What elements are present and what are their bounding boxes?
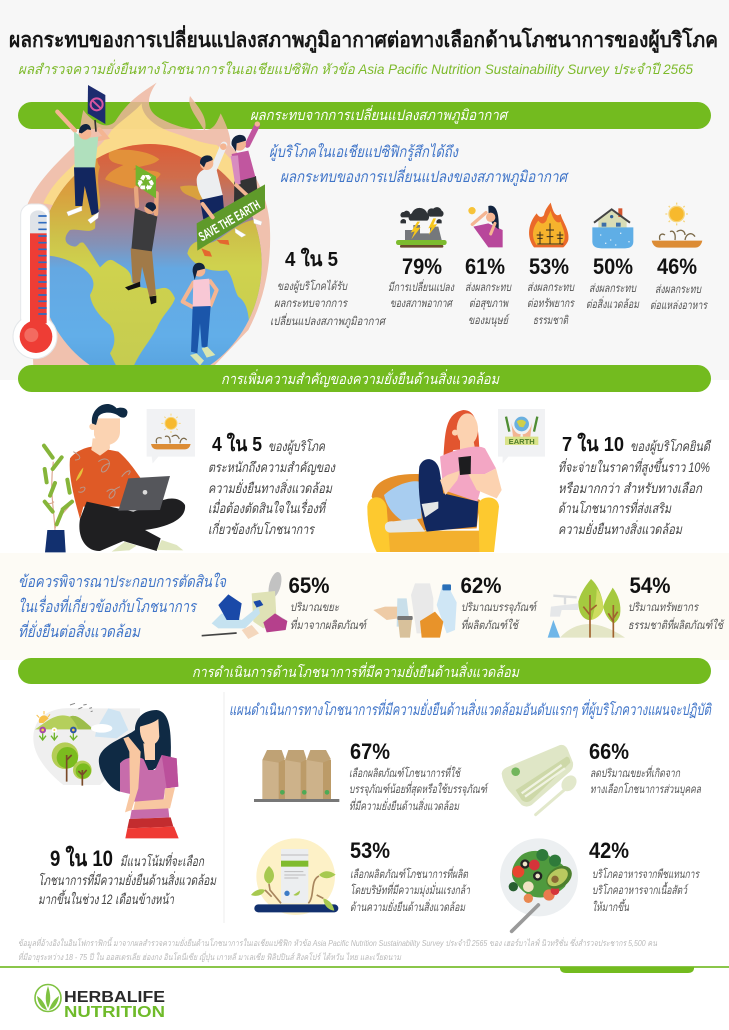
stat: 9 in 10: มีแนวโน้มที่จะเลือก [120, 852, 205, 869]
stat: 4 in 5 consumers: เปลี่ยนแปลงสภาพภูมิอากาศ [270, 313, 386, 328]
stat: 53 percent: โดยบริษัทที่มีความมุ่งมั่นแรงกล้า [350, 882, 470, 897]
icon: packaging containers [373, 583, 457, 638]
speech bubble: hands holding earth: EARTH [509, 439, 535, 446]
section bar 1 label: ผลกระทบจากการเปลี่ยนแปลงสภาพภูมิอากาศ [250, 105, 510, 124]
stat: 79 percent: ของสภาพอากาศ [390, 298, 453, 310]
blue subheading 1: ผลกระทบของการเปลี่ยนแปลงของสภาพภูมิอากาศ [280, 166, 570, 187]
flames [27, 83, 270, 367]
illustration: globe with flames, protesters and thermometer [13, 83, 277, 384]
icon: flooded house [592, 208, 633, 248]
stat: 46 percent [650, 254, 708, 312]
stat: 9 in 10: โภชนาการที่มีความยั่งยืนด้านสิ่งแวดล้อม [38, 871, 217, 888]
page background: top grey band [0, 0, 729, 380]
stat: 42 percent: 42% [589, 838, 629, 863]
land: americas [50, 158, 175, 365]
protester in white shirt [197, 143, 229, 257]
stat: 53 percent [350, 838, 470, 914]
stat: 61 percent: ต่อสุขภาพ [469, 298, 509, 310]
stat: 79 percent: 79% [402, 254, 442, 279]
section bar 3: การดำเนินการด้านโภชนาการที่มีความยั่งยืนด้านสิ่งแวดล้อม [192, 662, 520, 681]
stat: 4 in 5 aware: ตระหนักถึงความสำคัญของ [208, 460, 336, 476]
banner: save the earth [196, 184, 265, 251]
footer line and tab [0, 966, 729, 973]
icon: storm [396, 207, 447, 248]
section bar 2 [18, 365, 711, 392]
stat: 53 percent: ต่อทรัพยากร [527, 297, 575, 310]
stat: 53 percent: ด้านความยั่งยืนด้านสิ่งแวดล้อม [350, 899, 466, 914]
protester in pink top [183, 263, 217, 365]
stat: 4 in 5 consumers: ของผู้บริโภคได้รับ [277, 279, 348, 293]
icon: wildfire [529, 203, 569, 247]
stat: 4 in 5 aware: เมื่อต้องตัดสินใจในเรื่องที่ [208, 499, 327, 516]
protester with recycling sign [125, 165, 157, 304]
stat: 7 in 10 willing to pay: ความยั่งยืนทางสิ่งแวดล้อม [558, 520, 683, 537]
stat: 61 percent [465, 254, 512, 327]
stat: 79 percent [388, 254, 455, 310]
blue subheading 1: ผู้บริโภคในเอเชียแปซิฟิกรู้สึกได้ถึง [269, 143, 459, 162]
section bar 1 [18, 102, 711, 129]
divider [223, 692, 225, 923]
stat: 53 percent [527, 254, 575, 327]
stat: 42 percent [589, 838, 700, 914]
thermometer [13, 204, 57, 359]
stat: 4 in 5 consumers: ผลกระทบจากการ [274, 298, 349, 310]
icon: faucet and trees [548, 579, 625, 638]
stat: 66 percent: 66% [589, 739, 629, 764]
icon: product with plants [251, 838, 338, 915]
illustration: woman thinking and nature [33, 703, 179, 838]
stat: 54 percent [628, 573, 725, 632]
stat: 62 percent: 62% [460, 573, 502, 598]
stat: 4 in 5 aware: ความยั่งยืนทางสิ่งแวดล้อม [208, 479, 333, 496]
stat: 66 percent: ลดปริมาณขยะที่เกิดจาก [590, 765, 681, 780]
stat: 4 in 5 consumers [270, 247, 386, 328]
stat: 9 in 10 [38, 845, 217, 907]
stat: 67 percent: 67% [350, 739, 390, 764]
stat: 62 percent: ปริมาณบรรจุภัณฑ์ [461, 600, 538, 614]
stat: 9 in 10: 9 ใน 10 [50, 845, 113, 871]
stat: 67 percent [349, 739, 489, 813]
blue heading: decision considerations: ในเรื่องที่เกี่ยวข้องกับโภชนาการ [18, 595, 198, 616]
logo: Herbalife Nutrition [35, 984, 165, 1021]
icon: cardboard cartons [254, 750, 339, 802]
stat: 7 in 10 willing to pay: ด้านโภชนาการที่ส่งเสริม [558, 499, 672, 516]
stat: 46 percent: ส่งผลกระทบ [655, 284, 702, 296]
stat: 65 percent: ที่มาจากผลิตภัณฑ์ [290, 617, 369, 632]
stat: 4 in 5 aware: เกี่ยวข้องกับโภชนาการ [208, 520, 315, 537]
stat: 54 percent: 54% [630, 573, 670, 598]
stat: 79 percent: มีการเปลี่ยนแปลง [388, 279, 455, 294]
stat: 66 percent [589, 739, 702, 796]
page background: cream band [0, 553, 729, 660]
stat: 4 in 5 aware: 4 ใน 5 [212, 432, 262, 456]
section bar 2: การเพิ่มความสำคัญของความยั่งยืนด้านสิ่งแวดล้อม [221, 369, 500, 388]
stat: 62 percent: ที่ผลิตภัณฑ์ใช้ [461, 617, 520, 632]
stat: 67 percent: ที่มีความยั่งยืนด้านสิ่งแวดล้อม [349, 798, 460, 813]
blue heading: decision considerations [18, 572, 227, 641]
globe [50, 144, 262, 365]
stat: 7 in 10 willing to pay [558, 432, 712, 537]
stat: 54 percent: ปริมาณทรัพยากร [628, 601, 699, 614]
stat: 53 percent: ธรรมชาติ [533, 314, 569, 327]
stat: 62 percent [460, 573, 538, 632]
stat: 50 percent [586, 254, 640, 311]
logo: Herbalife Nutrition: HERBALIFE [64, 989, 165, 1006]
stat: 61 percent: ของมนุษย์ [468, 313, 510, 327]
blue heading: decision considerations: ข้อควรพิจารณาประกอบการตัดสินใจ [18, 572, 227, 591]
section bar 3 [18, 658, 711, 684]
banner: save the earth: SAVE THE EARTH [196, 197, 263, 244]
speech bubble: hands holding earth [498, 409, 545, 463]
protester with recycling sign: ♻ [137, 173, 154, 192]
icon: reusable cutlery case [502, 745, 580, 815]
stat: 65 percent [288, 573, 369, 632]
stat: 7 in 10 willing to pay: 7 ใน 10 [562, 432, 624, 456]
stat: 61 percent: 61% [465, 254, 505, 279]
stat: 53 percent: 53% [350, 838, 390, 863]
stat: 53 percent: ส่งผลกระทบ [527, 282, 575, 294]
stat: 46 percent: ต่อแหล่งอาหาร [650, 300, 708, 312]
protester with no sign [57, 85, 106, 224]
stat: 61 percent: ส่งผลกระทบ [465, 282, 512, 294]
protester in purple shirt [231, 121, 262, 237]
logo: Herbalife Nutrition: NUTRITION [64, 1004, 165, 1021]
stat: 50 percent: 50% [593, 254, 633, 279]
land: africa [187, 220, 262, 320]
stat: 42 percent: ให้มากขึ้น [592, 898, 630, 914]
stat: 4 in 5 consumers: 4 ใน 5 [285, 247, 338, 271]
footnote [18, 937, 657, 963]
illustration: man with laptop and plant [44, 404, 185, 552]
subtitle: ผลสำรวจความยั่งยืนทางโภชนาการในเอเชียแปซิฟิก หัวข้อ Asia Pacific Nutrition Sustainability Survey ประจำปี 2565 [18, 59, 693, 77]
stat: 9 in 10: มากขึ้นในช่วง 12 เดือนข้างหน้า [38, 889, 174, 907]
speech bubble: sun and crops [147, 409, 195, 463]
blue subheading 1 [269, 143, 570, 187]
stat: 7 in 10 willing to pay: หรือมากกว่า สำหรับทางเลือก [558, 481, 703, 496]
illustration: woman on armchair [367, 410, 502, 552]
stat: 50 percent: ส่งผลกระทบ [589, 283, 637, 295]
icon: packaging waste pile [202, 571, 288, 639]
icon: salad plate with fork [500, 838, 578, 931]
stat: 4 in 5 aware [208, 432, 336, 537]
stat: 50 percent: ต่อสิ่งแวดล้อม [586, 296, 640, 311]
stat: 42 percent: บริโภคอาหารจากเนื้อสัตว์ [592, 881, 689, 897]
stat: 7 in 10 willing to pay: ของผู้บริโภคยินดี [630, 438, 712, 455]
stat: 65 percent: ปริมาณขยะ [290, 601, 340, 614]
land: gold patch [180, 186, 202, 200]
stat: 46 percent: 46% [657, 254, 697, 279]
stat: 67 percent: เลือกผลิตภัณฑ์โภชนาการที่ใช้ [349, 765, 461, 780]
stat: 53 percent: เลือกผลิตภัณฑ์โภชนาการที่ผลิต [350, 866, 468, 881]
footnote: ที่มีอายุระหว่าง 18 - 75 ปี ใน ออสเตรเลีย ฮ่องกง อินโดนีเซีย ญี่ปุ่น เกาหลี มาเลเซีย ฟิลิปปินส์ สิงคโปร์ ไต้หวัน ไทย และเวียดนาม [18, 951, 401, 963]
icon: sun and wilted crops [652, 203, 702, 248]
blue heading: decision considerations: ที่ยั่งยืนต่อสิ่งแวดล้อม [18, 620, 141, 641]
stat: 65 percent: 65% [288, 573, 330, 598]
stat: 4 in 5 aware: ของผู้บริโภค [268, 438, 326, 455]
icon: woman shielding from the sun [468, 206, 503, 247]
land: orange patches [105, 150, 161, 188]
stat: 67 percent: บรรจุภัณฑ์น้อยที่สุดหรือใช้บรรจุภัณฑ์ [349, 781, 489, 796]
stat: 53 percent: 53% [529, 254, 569, 279]
